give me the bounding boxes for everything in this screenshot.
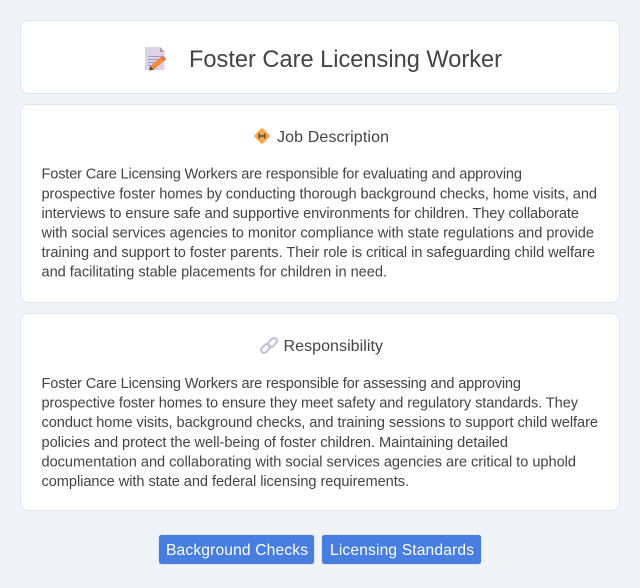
text block: responsibility: conduct home visits, background checks, and training sessions to support child welfare [42, 415, 598, 431]
panel: job description [20, 104, 620, 302]
tag: background checks: Background Checks [166, 542, 308, 559]
heading: job description: Job Description [277, 129, 389, 146]
text block: responsibility: Foster Care Licensing Workers are responsible for assessing and approving [42, 376, 521, 392]
text block: job description: interviews to ensure safe and supportive environments for children. They collaborate [42, 206, 579, 222]
text block: job description [40, 167, 597, 281]
heading: responsibility: Responsibility [284, 338, 383, 355]
tag: licensing standards: Licensing Standards [330, 542, 474, 559]
title: Foster Care Licensing Worker [189, 47, 502, 73]
icon: diamond road sign [254, 128, 270, 144]
text block: responsibility: prospective foster homes to ensure they meet safety and regulatory standards. They [42, 396, 579, 412]
header panel [20, 20, 620, 94]
text block: job description: training and support to foster parents. Their role is critical in safeguarding child welfare [42, 245, 595, 261]
text block: responsibility [42, 376, 598, 490]
text block: job description: with social services agencies to monitor compliance with state regulations and provide [40, 226, 594, 242]
icon: document with pencil [145, 47, 164, 70]
text block: job description: prospective foster homes by conducting thorough background checks, home visits, and [42, 186, 597, 202]
panel: responsibility [20, 314, 620, 510]
text block: responsibility: documentation and collaborating with social services agencies are critical to uphold [42, 454, 576, 470]
tag: licensing standards [322, 534, 482, 564]
text block: job description: Foster Care Licensing Workers are responsible for evaluating and approving [42, 167, 522, 183]
text block: job description: and facilitating stable placements for children in need. [42, 265, 387, 281]
tag: background checks [158, 534, 314, 564]
icon: chain link [260, 337, 278, 354]
text block: responsibility: policies and protect the well-being of foster children. Maintaining detailed [42, 435, 508, 451]
text block: responsibility: compliance with state and federal licensing requirements. [42, 474, 409, 490]
